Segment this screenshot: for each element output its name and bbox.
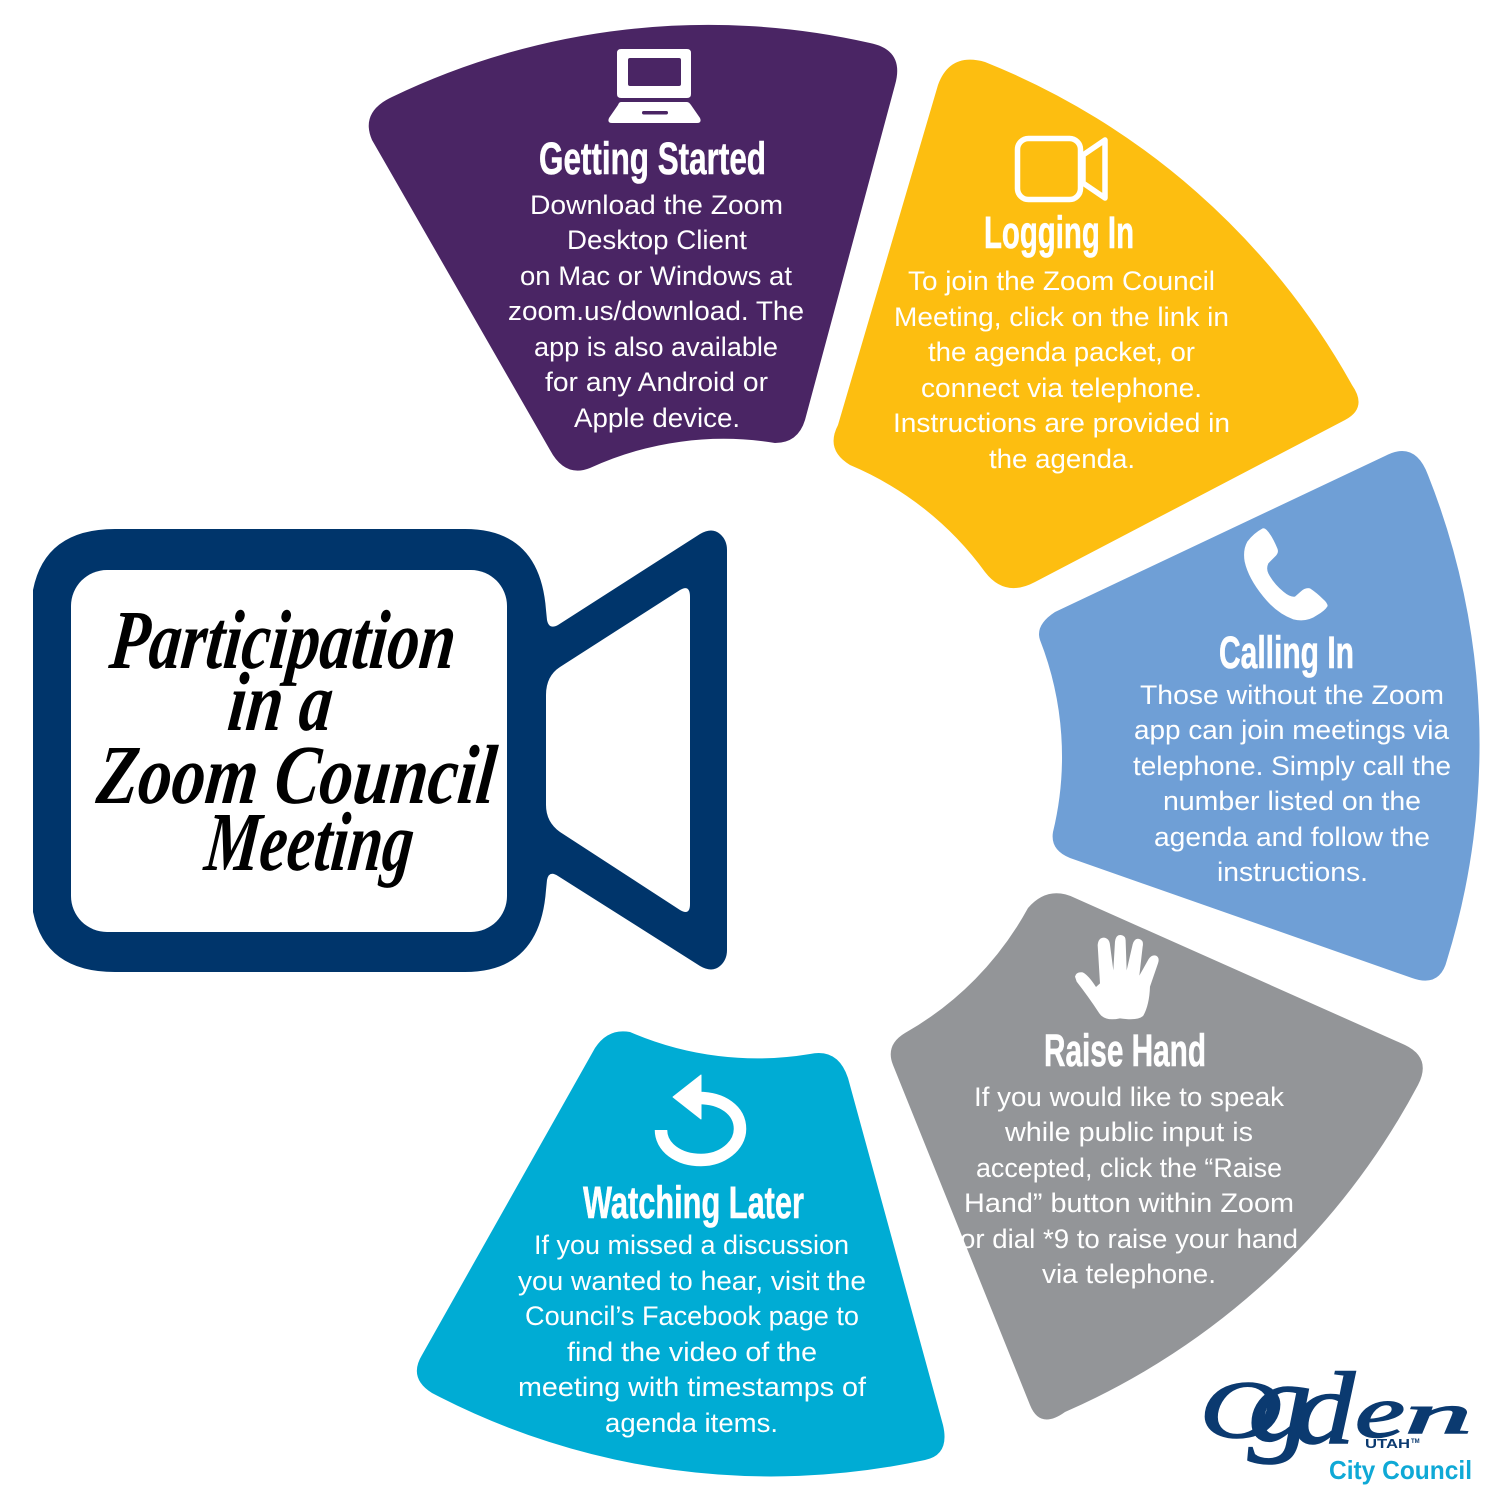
panel: watching later bbox=[417, 1031, 945, 1476]
text block: watching later: you wanted to hear, visit the bbox=[518, 1266, 866, 1296]
text block: logging in: Instructions are provided in bbox=[893, 408, 1230, 438]
heading: raise hand: Raise Hand bbox=[1044, 1025, 1206, 1076]
heading: calling in: Calling In bbox=[1219, 627, 1354, 678]
panel: calling in bbox=[1039, 451, 1480, 981]
text block: calling in: number listed on the bbox=[1163, 786, 1421, 816]
text block: raise hand: or dial *9 to raise your hand bbox=[960, 1224, 1298, 1254]
logo: Ogden Utah City Council: City Council bbox=[1329, 1455, 1472, 1485]
text block: getting started: for any Android or bbox=[545, 367, 768, 397]
text block: calling in: Those without the Zoom bbox=[1140, 680, 1444, 710]
logo: Ogden Utah City Council: TM bbox=[1411, 1439, 1420, 1445]
icon: video camera bbox=[1018, 138, 1105, 200]
heading: watching later: Watching Later bbox=[583, 1177, 804, 1228]
title: Zoom Council bbox=[92, 729, 501, 822]
text block: watching later: Council’s Facebook page to bbox=[525, 1301, 859, 1331]
text block: calling in: app can join meetings via bbox=[1134, 715, 1450, 745]
text block: getting started: on Mac or Windows at bbox=[520, 261, 792, 291]
text block: logging in: To join the Zoom Council bbox=[908, 266, 1215, 296]
panel: video camera title frame bbox=[33, 529, 727, 972]
text block: getting started bbox=[508, 190, 804, 433]
text block: watching later: agenda items. bbox=[605, 1408, 778, 1438]
text block: logging in: the agenda. bbox=[989, 444, 1135, 474]
logo: Ogden Utah City Council: O bbox=[1200, 1364, 1282, 1455]
icon: laptop bbox=[608, 49, 701, 123]
text block: getting started: Apple device. bbox=[574, 403, 740, 433]
text block: raise hand: accepted, click the “Raise bbox=[976, 1153, 1282, 1183]
text block: calling in: instructions. bbox=[1217, 857, 1368, 887]
heading: getting started: Getting Started bbox=[539, 133, 766, 184]
title: Participation bbox=[105, 594, 461, 687]
text block: raise hand bbox=[960, 1082, 1298, 1289]
text block: calling in: telephone. Simply call the bbox=[1133, 751, 1451, 781]
title bbox=[92, 594, 501, 889]
logo: Ogden Utah City Council: d bbox=[1293, 1352, 1356, 1466]
text block: raise hand: via telephone. bbox=[1042, 1259, 1216, 1289]
text block: logging in: connect via telephone. bbox=[921, 373, 1202, 403]
text block: calling in: agenda and follow the bbox=[1154, 822, 1430, 852]
text block: getting started: zoom.us/download. The bbox=[508, 296, 804, 326]
text block: watching later: find the video of the bbox=[567, 1337, 817, 1367]
text block: logging in: Meeting, click on the link in bbox=[894, 302, 1229, 332]
text block: getting started: Download the Zoom bbox=[530, 190, 783, 220]
text block: watching later: meeting with timestamps of bbox=[518, 1372, 867, 1402]
logo: Ogden Utah City Council: n bbox=[1405, 1384, 1472, 1446]
text block: calling in bbox=[1133, 680, 1451, 887]
text block: raise hand: while public input is bbox=[1004, 1117, 1253, 1147]
text block: raise hand: If you would like to speak bbox=[974, 1082, 1285, 1112]
panel: getting started bbox=[369, 25, 897, 471]
heading: logging in: Logging In bbox=[984, 207, 1134, 258]
logo: Ogden Utah City Council: g bbox=[1248, 1341, 1312, 1465]
icon: telephone bbox=[1244, 528, 1328, 620]
icon: replay arrow bbox=[661, 1075, 740, 1160]
text block: logging in: the agenda packet, or bbox=[928, 337, 1195, 367]
logo: Ogden Utah City Council bbox=[1200, 1341, 1472, 1485]
panel: logging in bbox=[834, 60, 1359, 588]
icon: raised hand bbox=[1075, 935, 1159, 1019]
text block: logging in bbox=[893, 266, 1230, 474]
title: in a bbox=[224, 656, 338, 749]
text block: raise hand: Hand” button within Zoom bbox=[964, 1188, 1294, 1218]
logo: Ogden Utah City Council: e bbox=[1355, 1372, 1405, 1454]
text block: getting started: app is also available bbox=[534, 332, 778, 362]
panel: raise hand bbox=[891, 893, 1423, 1420]
text block: watching later bbox=[518, 1230, 867, 1438]
title: Meeting bbox=[200, 796, 419, 889]
logo: Ogden Utah City Council: UTAH bbox=[1365, 1437, 1410, 1451]
text block: getting started: Desktop Client bbox=[567, 225, 747, 255]
text block: watching later: If you missed a discussion bbox=[534, 1230, 849, 1260]
